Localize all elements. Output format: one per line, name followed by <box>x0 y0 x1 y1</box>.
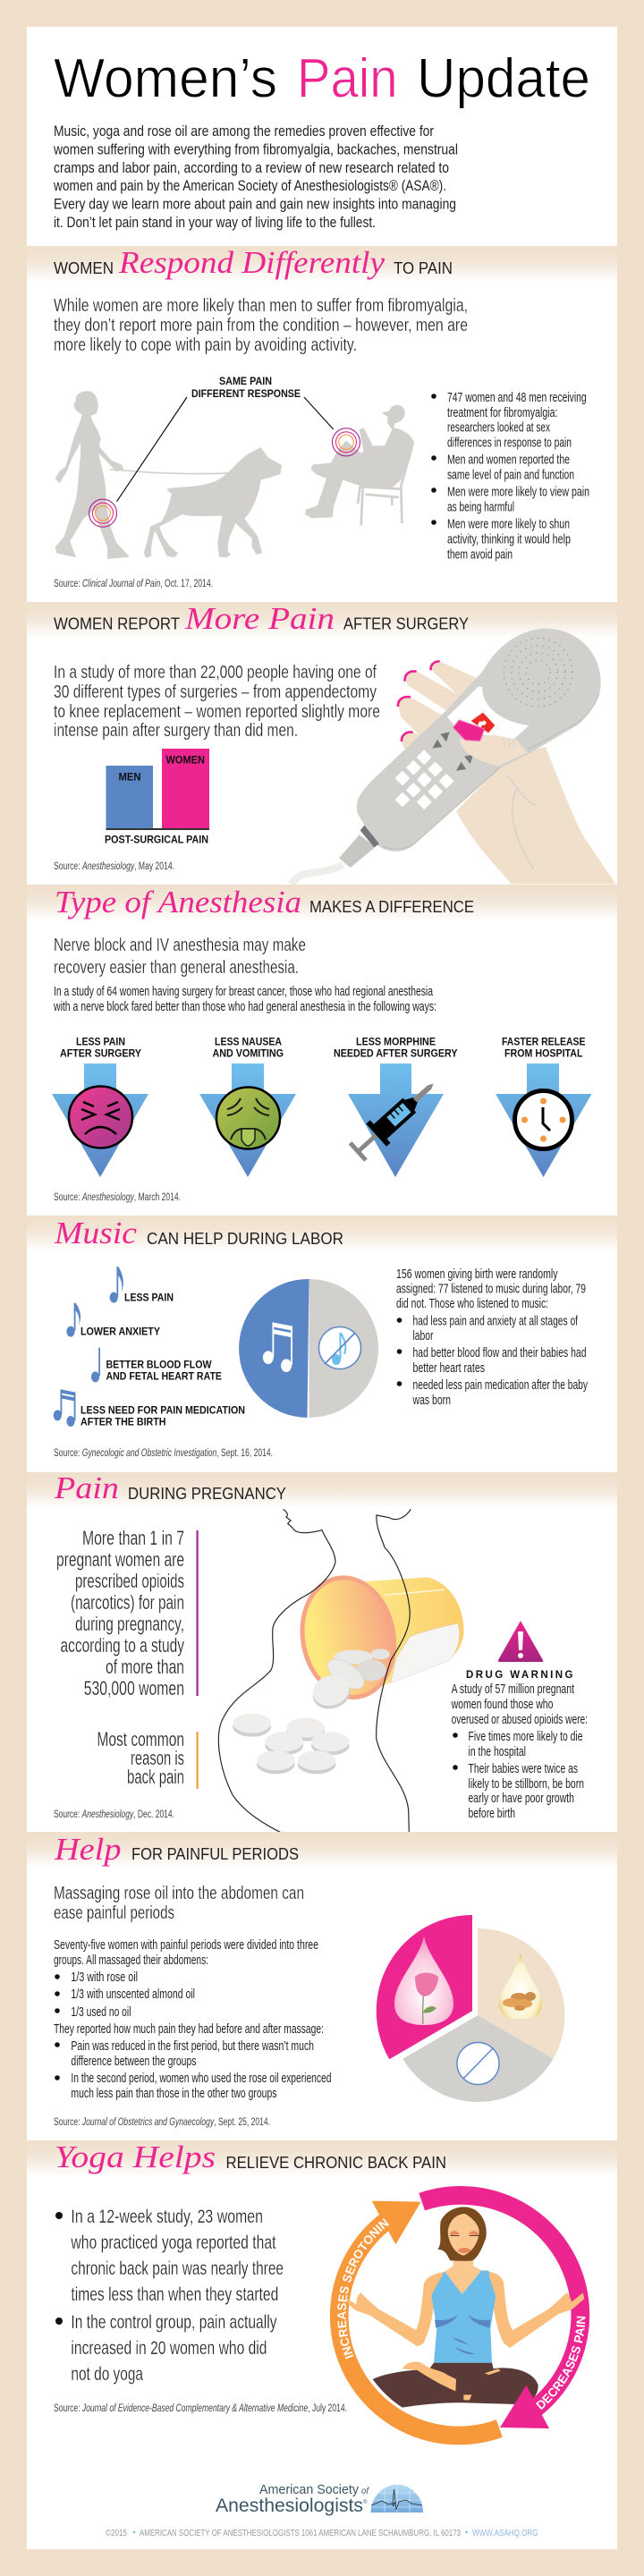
study text: 1/3 with rose oil <box>71 1970 138 1985</box>
intro paragraph: women and pain by the American Society of Anesthesiologists® (ASA®). <box>53 178 446 194</box>
music benefit labels: AND FETAL HEART RATE <box>106 1372 222 1383</box>
bullet list <box>431 390 589 562</box>
logo: american society of anesthesiologists: ® <box>363 2499 368 2505</box>
bar chart: post-surgical pain <box>105 749 209 846</box>
heading: yoga helps: Yoga Helps <box>55 2140 216 2174</box>
illustration: pregnant body, spilled pill bottle <box>218 1509 463 1833</box>
bullet list: activity, thinking it would help <box>447 531 571 547</box>
arrow: increases serotonin: INCREASES SEROTONIN <box>337 2218 389 2360</box>
lead text: to knee replacement – women reported slightly more <box>54 702 380 722</box>
music study text: 156 women giving birth were randomly <box>396 1267 558 1282</box>
callout: 1 in 7 <box>56 1527 199 1699</box>
title: Pain <box>297 48 397 109</box>
heading: more pain <box>54 601 469 636</box>
benefit: less nausea: LESS NAUSEA <box>215 1038 282 1048</box>
source: Source: Anesthesiology, Dec. 2014. <box>54 1809 174 1820</box>
music study text <box>396 1267 588 1408</box>
panel: women respond differently <box>27 245 617 589</box>
bullet list: 747 women and 48 men receiving <box>447 390 587 405</box>
music study text: did not. Those who listened to music: <box>396 1296 548 1311</box>
study text: groups. All massaged their abdomens: <box>54 1953 208 1968</box>
icon: no oil <box>457 2043 499 2084</box>
callout: 1 in 7: (narcotics) for pain <box>71 1591 184 1614</box>
callout: 1 in 7: prescribed opioids <box>75 1570 184 1592</box>
study text: Seventy-five women with painful periods were divided into three <box>54 1937 318 1953</box>
icon: white music notes <box>263 1322 292 1372</box>
bullet list: researchers looked at sex <box>447 420 550 435</box>
heading: more pain: More Pain <box>184 601 335 636</box>
heading: music: CAN HELP DURING LABOR <box>147 1229 343 1248</box>
callout: 1 in 7: of more than <box>106 1656 184 1678</box>
heading: more pain: AFTER SURGERY <box>343 614 469 633</box>
benefit: less nausea: AND VOMITING <box>213 1048 284 1059</box>
benefit: less morphine <box>334 1038 458 1177</box>
study description <box>53 984 436 1014</box>
heading: yoga helps: RELIEVE CHRONIC BACK PAIN <box>225 2153 446 2172</box>
illustration: meditating woman inside arrows <box>329 2186 590 2445</box>
heading: help <box>54 1832 299 1867</box>
source: Source: Clinical Journal of Pain, Oct. 17, 2014. <box>54 579 213 589</box>
pie chart: music vs no music <box>239 1279 378 1418</box>
callout: 1 in 7: according to a study <box>61 1634 184 1657</box>
study text: much less pain than those in the other two groups <box>71 2086 277 2101</box>
icons: music notes <box>54 1267 123 1427</box>
lead text <box>54 296 468 355</box>
callout: 1 in 7: pregnant women are <box>56 1548 184 1571</box>
logo: american society of anesthesiologists: American Society <box>259 2482 359 2497</box>
arrow: increases serotonin <box>329 2200 503 2445</box>
study text: difference between the groups <box>71 2054 197 2069</box>
benefit: less pain <box>52 1038 148 1177</box>
bullet list: Men were more likely to view pain <box>447 485 589 499</box>
panel: more pain after surgery <box>27 601 617 884</box>
logo: american society of anesthesiologists <box>216 2482 423 2516</box>
drug warning text: DRUG WARNING <box>466 1670 573 1681</box>
yoga bullet text: increased in 20 women who did <box>71 2338 267 2359</box>
bullet list: Men and women reported the <box>447 453 570 467</box>
intro paragraph: cramps and labor pain, according to a review of new research related to <box>54 160 449 176</box>
heading: respond differently: WOMEN <box>54 258 114 277</box>
study description: with a nerve block fared better than those who had general anesthesia in the following ways: <box>53 999 436 1014</box>
music benefit labels: BETTER BLOOD FLOW <box>106 1360 212 1370</box>
benefit: less pain: LESS PAIN <box>76 1038 125 1048</box>
drug warning text: A study of 57 million pregnant <box>452 1682 575 1697</box>
bullet list: same level of pain and function <box>447 467 574 483</box>
silhouette: woman walking dog <box>55 391 282 559</box>
yoga bullet text <box>55 2207 284 2385</box>
benefit: faster release: FROM HOSPITAL <box>504 1048 583 1059</box>
icon: pained face <box>69 1086 132 1148</box>
lead text: ease painful periods <box>54 1903 174 1923</box>
drug warning text: in the hospital <box>469 1744 526 1759</box>
callout: 1 in 7: during pregnancy, <box>75 1613 184 1635</box>
yoga bullet text: chronic back pain was nearly three <box>71 2258 284 2279</box>
lead text: In a study of more than 22,000 people having one of <box>54 663 377 682</box>
callout: same pain different response <box>116 377 334 502</box>
title <box>54 48 590 109</box>
icon: dome with heartbeat line <box>371 2485 423 2512</box>
icon: pain rings on woman's leg <box>89 499 116 527</box>
lead text: While women are more likely than men to suffer from fibromyalgia, <box>54 296 468 316</box>
drug warning text <box>451 1670 588 1821</box>
yoga bullet text: In a 12-week study, 23 women <box>71 2207 263 2227</box>
lead text <box>54 663 380 741</box>
logo: american society of anesthesiologists: of <box>361 2487 369 2496</box>
lead text: 30 different types of surgeries – from appendectomy <box>54 682 377 702</box>
benefit: less morphine: NEEDED AFTER SURGERY <box>334 1048 458 1059</box>
logo: american society of anesthesiologists: Anesthesiologists <box>216 2496 363 2516</box>
footer line: WWW.ASAHQ.ORG <box>472 2529 538 2538</box>
bar chart: post-surgical pain: MEN <box>118 773 141 784</box>
intro paragraph <box>53 123 458 231</box>
music benefit labels: LOWER ANXIETY <box>80 1327 160 1338</box>
icon: clock <box>515 1091 572 1148</box>
icon: rose oil drop <box>394 1936 453 2025</box>
footer line: AMERICAN SOCIETY OF ANESTHESIOLOGISTS 1061 AMERICAN LANE SCHAUMBURG, IL 60173 <box>140 2529 461 2538</box>
panel: music during labor <box>27 1216 617 1459</box>
yoga bullet text: who practiced yoga reported that <box>71 2233 276 2253</box>
lead text: more likely to cope with pain by avoiding activity. <box>54 335 357 355</box>
study description: In a study of 64 women having surgery for breast cancer, those who had regional anesthesia <box>54 984 433 999</box>
drug warning text: women found those who <box>451 1697 553 1712</box>
pie chart: oil groups <box>377 1915 564 2102</box>
lead text: Nerve block and IV anesthesia may make <box>54 936 306 955</box>
footer line: ©2015 <box>106 2529 127 2538</box>
lead text <box>54 936 306 978</box>
panel: type of anesthesia <box>27 885 617 1203</box>
callout: back pain: reason is <box>131 1747 184 1769</box>
icon: warning triangle <box>498 1621 543 1662</box>
benefit: less morphine: LESS MORPHINE <box>356 1038 436 1048</box>
heading: respond differently <box>54 245 453 280</box>
intro paragraph: Music, yoga and rose oil are among the remedies proven effective for <box>54 123 434 140</box>
heading: respond differently: Respond Differently <box>118 245 385 280</box>
music study text: better heart rates <box>413 1360 485 1376</box>
benefit: less nausea <box>199 1038 296 1177</box>
study text: 1/3 with unscented almond oil <box>71 1987 195 2002</box>
benefit: faster release <box>496 1038 592 1177</box>
heading: pain during pregnancy: DURING PREGNANCY <box>128 1484 286 1503</box>
drug warning text: Five times more likely to die <box>469 1729 583 1744</box>
yoga bullet text: In the control group, pain actually <box>71 2312 277 2333</box>
icon: no music <box>318 1327 361 1368</box>
callout: back pain <box>97 1728 199 1789</box>
panel: help for painful periods <box>27 1832 617 2128</box>
source: Source: Journal of Evidence-Based Complementary & Alternative Medicine, July 2014. <box>54 2403 347 2414</box>
callout: back pain: back pain <box>127 1766 184 1788</box>
study text: In the second period, women who used the rose oil experienced <box>71 2071 332 2086</box>
bullet list: them avoid pain <box>447 547 513 562</box>
silhouette: man in chair <box>305 405 414 525</box>
woman <box>346 2207 584 2408</box>
heading: type of anesthesia <box>55 885 474 919</box>
heading: type of anesthesia: MAKES A DIFFERENCE <box>309 897 474 916</box>
bullet list: Men were more likely to shun <box>447 517 570 531</box>
arrow: decreases pain: DECREASES PAIN <box>536 2317 585 2410</box>
heading: respond differently: TO PAIN <box>394 258 453 277</box>
yoga bullet text: not do yoga <box>71 2364 143 2385</box>
source: Source: Journal of Obstetrics and Gynaecology, Sept. 25, 2014. <box>54 2117 270 2128</box>
heading: more pain: WOMEN REPORT <box>54 614 180 633</box>
heading: help: FOR PAINFUL PERIODS <box>131 1844 299 1863</box>
music study text: was born <box>412 1393 451 1408</box>
music benefit labels: LESS NEED FOR PAIN MEDICATION <box>80 1406 245 1417</box>
callout: 1 in 7: More than 1 in 7 <box>82 1527 184 1549</box>
heading: music: Music <box>54 1216 137 1250</box>
hands over arrows <box>346 2292 584 2315</box>
heading: pain during pregnancy <box>54 1470 286 1505</box>
source: Source: Gynecologic and Obstetric Investigation, Sept. 16, 2014. <box>54 1448 273 1459</box>
music study text: labor <box>413 1328 433 1343</box>
callout: 1 in 7: 530,000 women <box>84 1677 184 1699</box>
title: Update <box>417 48 590 109</box>
heading: type of anesthesia: Type of Anesthesia <box>55 885 301 919</box>
heading: pain during pregnancy: Pain <box>54 1470 119 1505</box>
panel: pain during pregnancy <box>27 1470 617 1833</box>
study text <box>54 1937 331 2101</box>
intro paragraph: women suffering with everything from fibromyalgia, backaches, menstrual <box>53 141 458 157</box>
bullet list: treatment for fibromyalgia: <box>447 405 558 420</box>
bullet list: as being harmful <box>447 499 514 515</box>
icon: pain rings on man's back <box>333 428 360 456</box>
intro paragraph: Every day we learn more about pain and gain new insights into managing <box>54 197 456 213</box>
arrow: decreases pain <box>419 2186 590 2428</box>
study text: Pain was reduced in the first period, but there wasn’t much <box>71 2038 314 2054</box>
benefit: less pain: AFTER SURGERY <box>60 1048 141 1059</box>
callout: back pain: Most common <box>97 1728 184 1750</box>
lead text: they don’t report more pain from the condition – however, men are <box>54 316 468 335</box>
title: Women’s <box>54 48 277 109</box>
callout: same pain different response: SAME PAIN <box>219 377 272 387</box>
icon: syringe <box>346 1072 444 1165</box>
drug warning text: likely to be stillborn, be born <box>469 1776 584 1792</box>
lead text: Massaging rose oil into the abdomen can <box>54 1884 304 1903</box>
study text: They reported how much pain they had before and after massage: <box>54 2021 324 2037</box>
callout: same pain different response: DIFFERENT RESPONSE <box>191 389 301 400</box>
study text: 1/3 used no oil <box>71 2004 131 2020</box>
bullet list: differences in response to pain <box>447 435 572 451</box>
source: Source: Anesthesiology, March 2014. <box>54 1192 181 1203</box>
lead text: recovery easier than general anesthesia. <box>54 958 299 978</box>
yoga bullet text: times less than when they started <box>71 2284 278 2305</box>
intro paragraph: it. Don’t let pain stand in your way of living life to the fullest. <box>54 215 376 231</box>
heading: music <box>54 1216 343 1250</box>
bar chart: post-surgical pain: WOMEN <box>166 755 205 766</box>
music benefit labels: AFTER THE BIRTH <box>80 1417 166 1428</box>
bar chart: post-surgical pain: POST-SURGICAL PAIN <box>105 835 208 846</box>
icon: almond oil drop <box>499 1953 542 2019</box>
drug warning text: Their babies were twice as <box>469 1761 578 1776</box>
benefit: faster release: FASTER RELEASE <box>502 1038 586 1048</box>
panel: yoga helps <box>27 2140 617 2445</box>
music benefit labels <box>80 1293 245 1428</box>
music benefit labels: LESS PAIN <box>124 1293 174 1304</box>
heading: help: Help <box>54 1832 122 1867</box>
drug warning text: early or have poor growth <box>469 1791 574 1806</box>
icon: nauseous face <box>216 1088 280 1148</box>
lead text <box>54 1884 304 1923</box>
illustration: hand holding pain pump <box>291 629 615 884</box>
heading: yoga helps <box>55 2140 446 2174</box>
drug warning text: before birth <box>469 1806 515 1821</box>
source: Source: Anesthesiology, May 2014. <box>54 861 174 872</box>
lead text: intense pain after surgery than did men. <box>54 721 298 741</box>
